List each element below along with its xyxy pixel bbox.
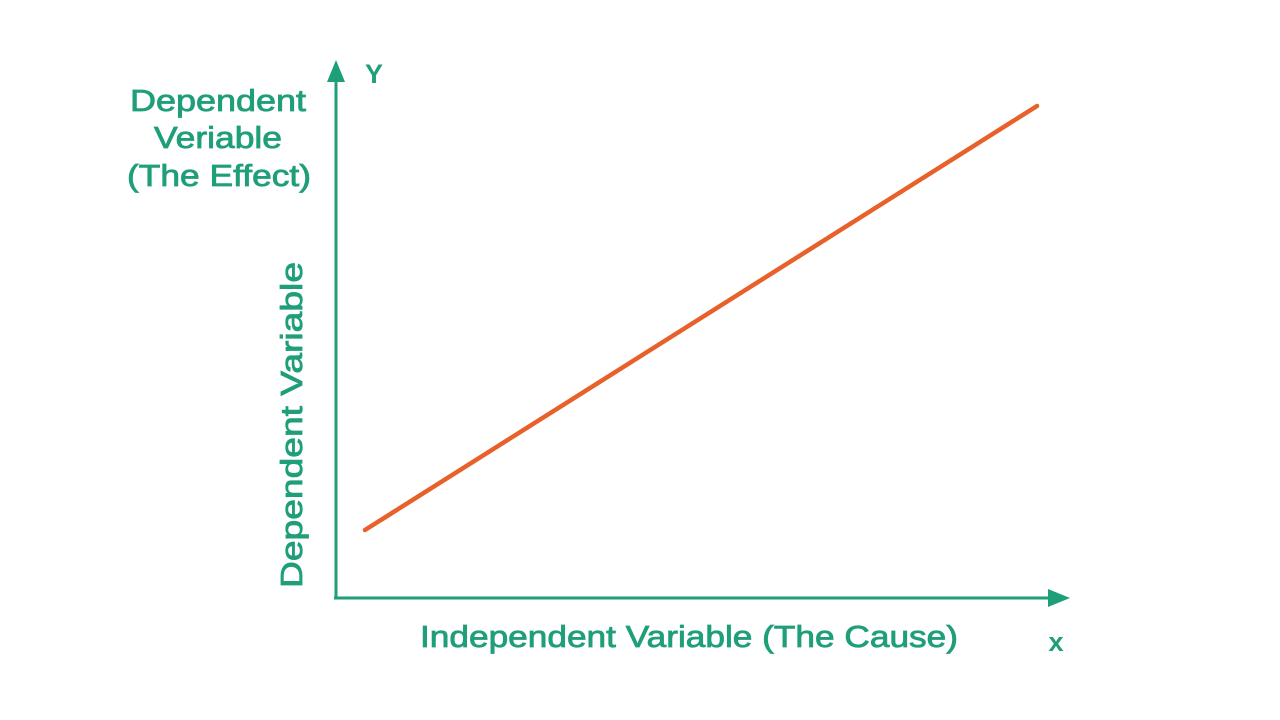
title: dependent variable (the effect): Dependent <box>130 83 306 118</box>
x axis <box>334 589 1070 607</box>
y axis letter: Y <box>365 59 383 89</box>
trend line <box>365 106 1037 530</box>
title: dependent variable (the effect): (The Effect) <box>127 158 311 193</box>
x axis label: Independent Variable (The Cause) <box>420 619 958 654</box>
title: dependent variable (the effect): Veriable <box>154 120 282 155</box>
rotated y label: Dependent Variable <box>274 262 309 588</box>
title: dependent variable (the effect) <box>127 83 311 193</box>
y axis <box>327 60 345 599</box>
x axis letter: x <box>1048 627 1064 657</box>
